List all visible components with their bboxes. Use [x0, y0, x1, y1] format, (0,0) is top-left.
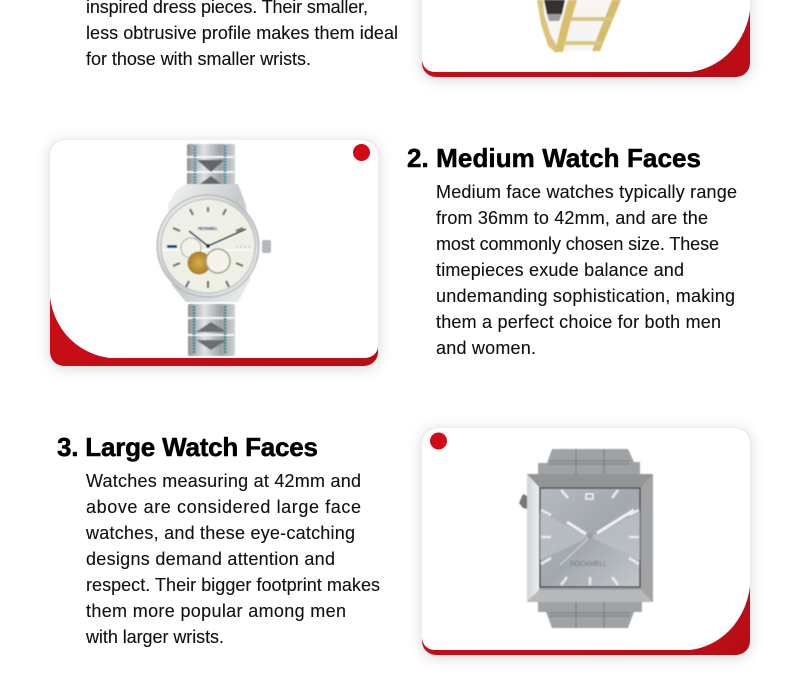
hands	[567, 510, 634, 534]
icon: red dot	[353, 144, 370, 161]
text block: medium watch description: most commonly chosen size. These	[436, 234, 719, 254]
dial	[540, 488, 640, 587]
case	[527, 474, 653, 602]
text block: large watch description: watches, and these eye-catching	[85, 523, 355, 543]
card white face	[422, 0, 750, 72]
icon: silver round watch: 1 2 3 4	[236, 245, 250, 249]
crown	[262, 240, 271, 253]
text block: medium watch description: from 36mm to 42mm, and are the	[436, 208, 708, 228]
panel: small watch image card	[422, 0, 750, 77]
text block: medium watch description: timepieces exude balance and	[436, 260, 684, 280]
text block: medium watch description: them a perfect choice for both men	[436, 312, 721, 332]
strap bottom	[188, 304, 235, 356]
case	[157, 195, 259, 297]
panel: medium watch image card	[50, 140, 378, 366]
text block: medium watch description: Medium face watches typically range	[436, 182, 737, 202]
strap bottom	[538, 602, 642, 628]
text block: medium watch description: and women.	[436, 338, 536, 358]
text block: large watch description: designs demand attention and	[86, 549, 335, 569]
crown	[519, 494, 527, 509]
icon: silver round watch	[157, 144, 271, 356]
card red backing	[422, 0, 750, 77]
icon: red dot	[430, 432, 447, 450]
text block: large watch description	[85, 471, 380, 647]
card red backing	[50, 140, 378, 366]
text block: medium watch description	[436, 182, 737, 358]
subdials	[181, 238, 201, 258]
card red backing	[422, 428, 750, 655]
lugs	[168, 184, 250, 302]
card white face	[422, 428, 750, 650]
icon: silver square watch	[519, 449, 653, 628]
strap top	[538, 449, 640, 474]
hour markers	[541, 490, 639, 585]
text block: small watch description: less obtrusive profile makes them ideal	[86, 23, 398, 43]
text block: large watch description: above are considered large face	[86, 497, 361, 517]
panel: large watch image card	[422, 428, 750, 655]
text block: large watch description: with larger wrists.	[85, 627, 224, 647]
text block: large watch description: respect. Their bigger footprint makes	[86, 575, 380, 595]
hour markers	[173, 207, 243, 288]
heading: medium watch faces: 2. Medium Watch Faces	[407, 143, 701, 173]
icon: gold and white watch bracelet	[537, 0, 621, 53]
text block: large watch description: them more popular among men	[86, 601, 346, 621]
strap top	[187, 144, 235, 192]
text block: medium watch description: undemanding sophistication, making	[436, 286, 735, 306]
hands	[189, 229, 246, 246]
text block: large watch description: Watches measuring at 42mm and	[86, 471, 361, 491]
brand: ROCKWELL	[198, 226, 218, 231]
text block: small watch description: for those with smaller wrists.	[86, 49, 311, 69]
brand: ROCKWELL	[570, 561, 607, 568]
text block: small watch description	[86, 0, 398, 69]
heading: large watch faces: 3. Large Watch Faces	[57, 432, 318, 462]
card white face	[50, 140, 378, 358]
